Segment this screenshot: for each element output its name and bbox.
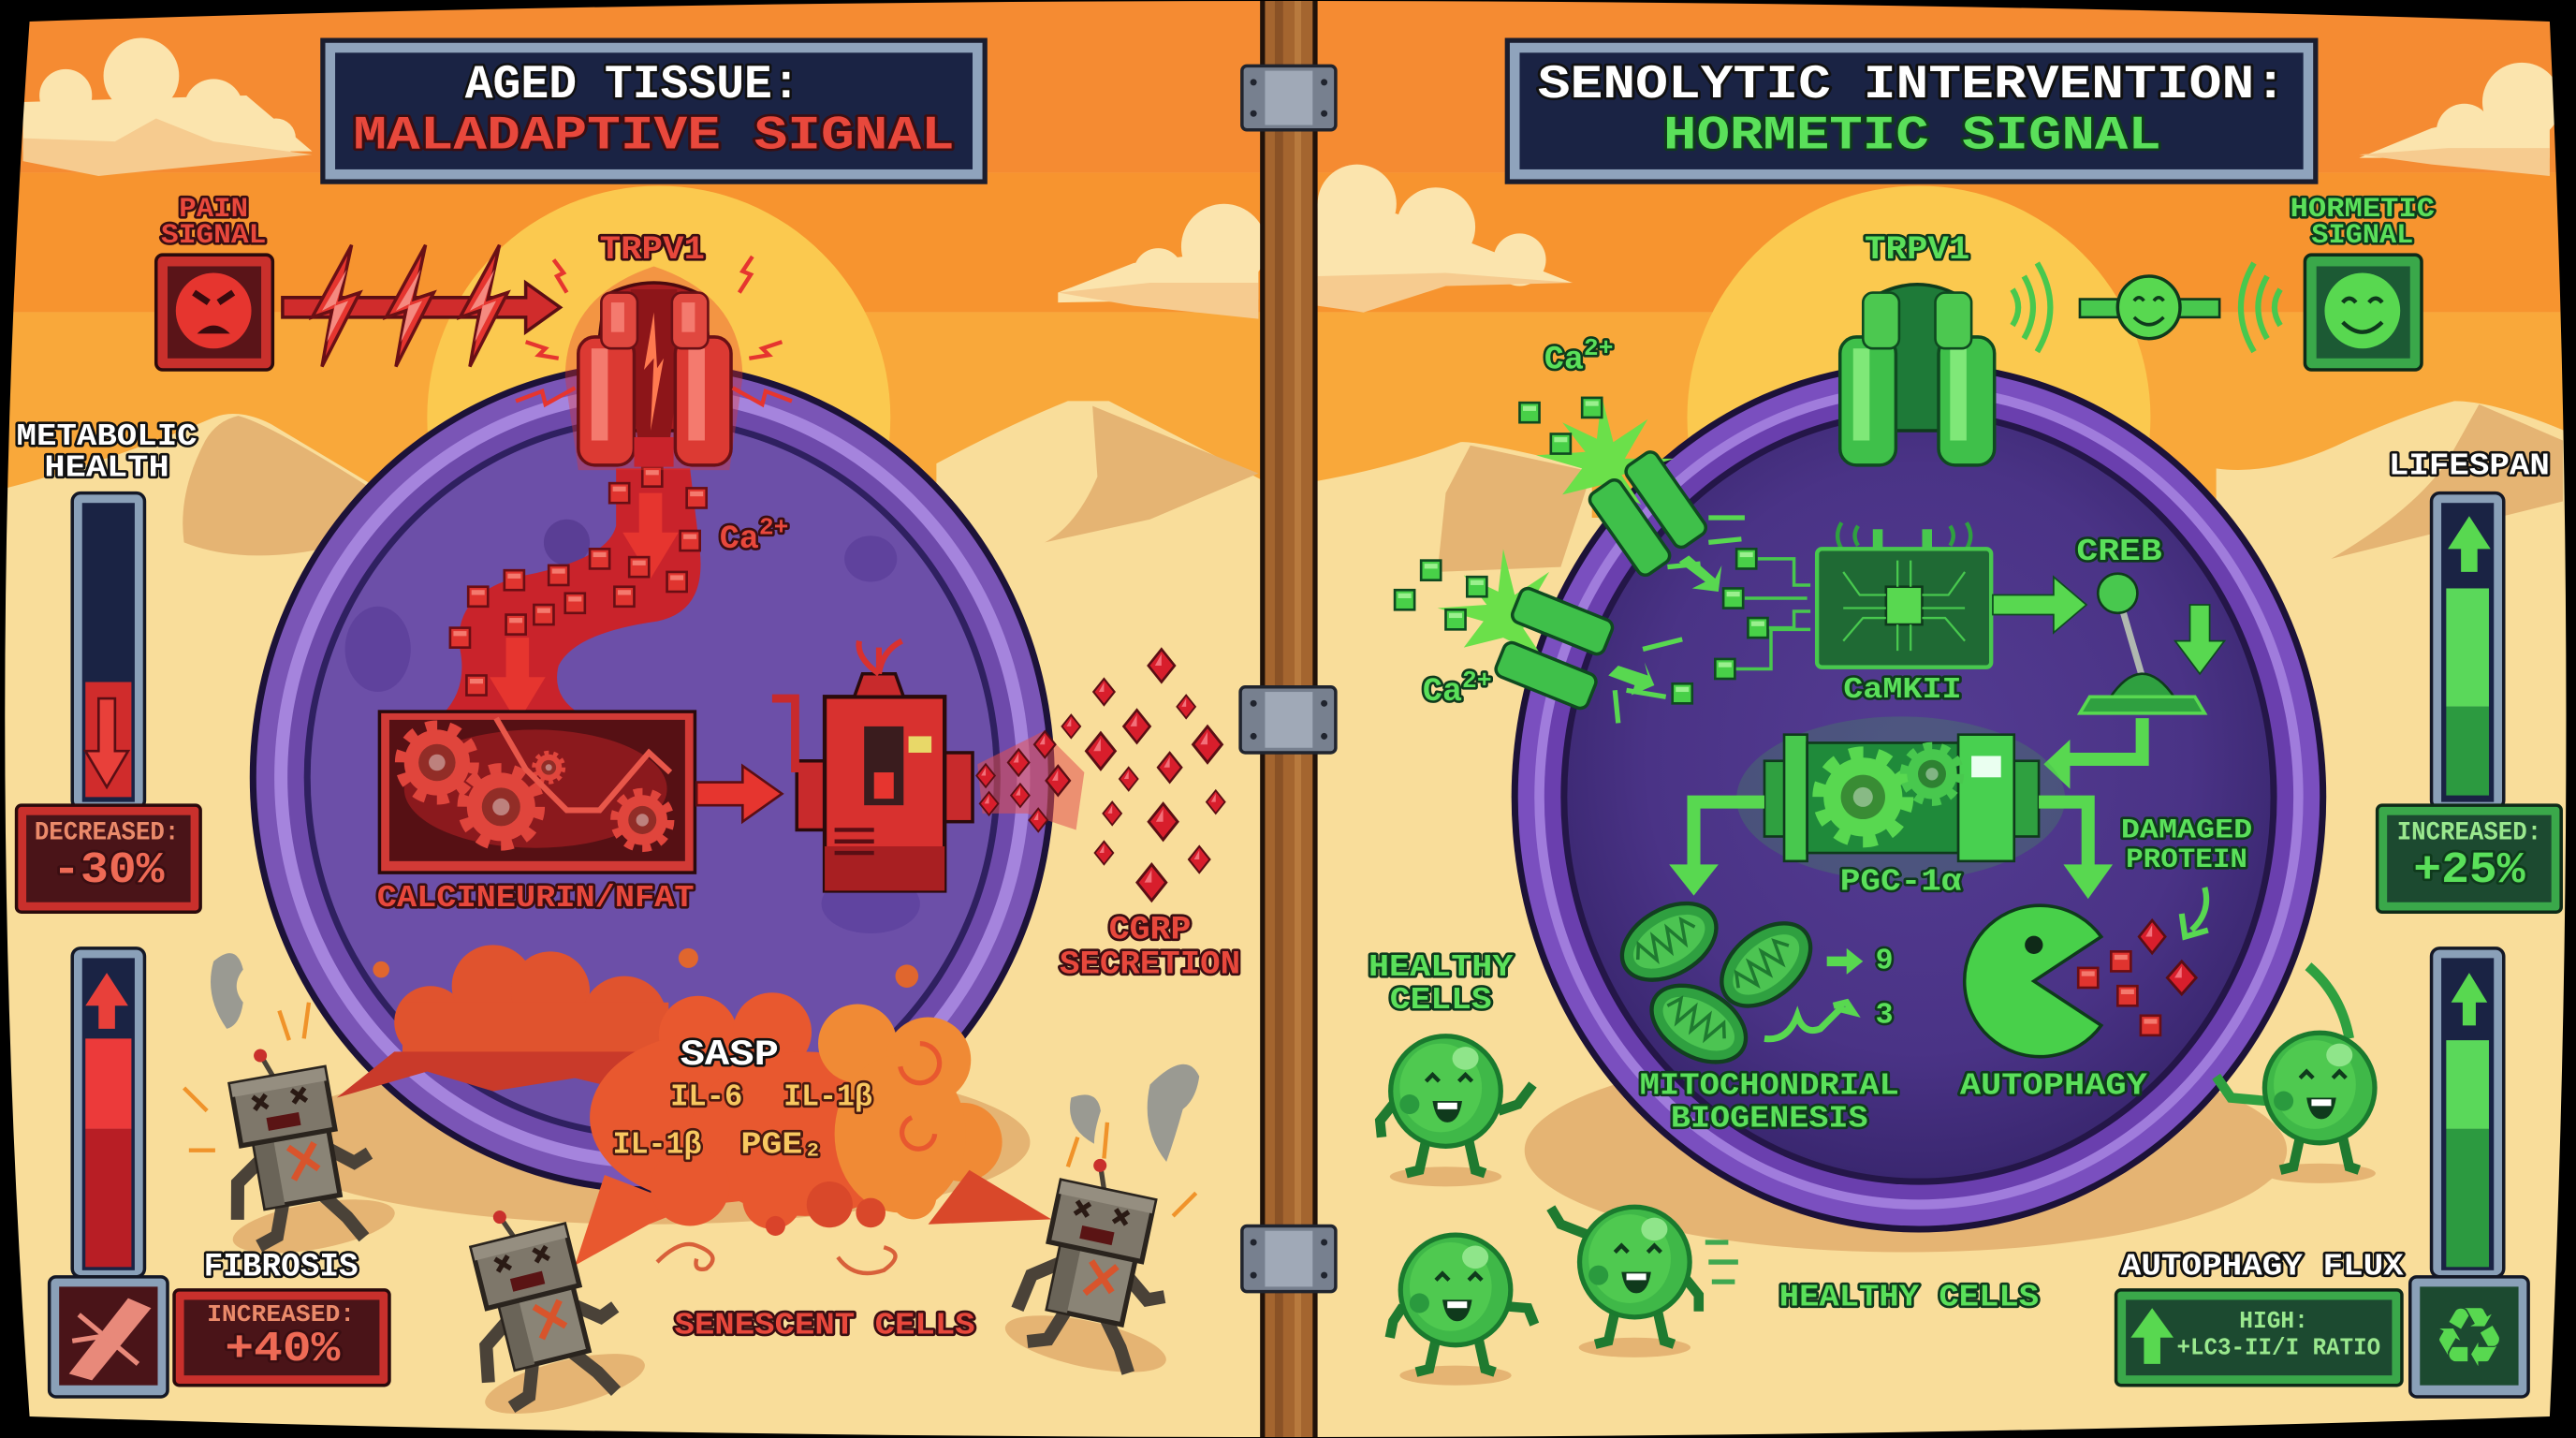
- label: CGRP secretion: CGRP: [1109, 912, 1191, 949]
- stat box: increased fibrosis: [174, 1290, 389, 1386]
- secretion machine: [772, 641, 973, 890]
- mitochondria counts: 9: [1876, 945, 1894, 977]
- arrow: calcineurin to machine: [696, 766, 782, 822]
- stat box: increased fibrosis: +40%: [225, 1325, 341, 1373]
- pacman autophagy: [1965, 905, 2101, 1057]
- stat box: decreased: [17, 805, 200, 912]
- icon: smile face: [2305, 255, 2422, 370]
- icon: fibrosis fiber: [50, 1277, 168, 1397]
- CGRP secretion diamonds: [976, 649, 1225, 901]
- label: CGRP secretion: SECRETION: [1060, 946, 1240, 983]
- healthy cell 2: [1390, 1232, 1534, 1386]
- calcineurin box: [379, 712, 695, 873]
- label: pain signal: [161, 193, 266, 251]
- clouds right: [1318, 63, 2561, 313]
- panel: senolytic intervention: [1314, 38, 2576, 1397]
- ground shadow under right cell: [1525, 1049, 2287, 1253]
- label: healthy cells top: [1368, 950, 1513, 1019]
- cell left: [250, 361, 1055, 1193]
- labels: Ca2+ right: 2+: [1584, 334, 1614, 362]
- SASP labels: [613, 1034, 872, 1163]
- stat box: increased fibrosis: INCREASED:: [207, 1300, 355, 1328]
- dunes left: [0, 401, 1262, 567]
- mitochondria counts: 3: [1876, 999, 1894, 1032]
- label: lifespan: LIFESPAN: [2389, 449, 2550, 485]
- icon: recycle: ♻: [2433, 1290, 2506, 1386]
- SASP labels: IL-1β: [783, 1080, 872, 1116]
- arrow: CREB to PGC-1a: [2063, 718, 2143, 759]
- SASP cloud: [337, 945, 1051, 1273]
- label: calcineurin: CALCINEURIN/NFAT: [377, 881, 695, 917]
- calcium stream: [440, 467, 707, 723]
- ground shadow under left cell: [268, 1060, 1030, 1225]
- SASP labels: IL-1β: [613, 1127, 701, 1163]
- label: mitochondrial biogenesis: BIOGENESIS: [1671, 1101, 1868, 1137]
- icon: angry face: [156, 255, 272, 370]
- cell right: [1512, 361, 2326, 1232]
- title: senolytic intervention: [1505, 38, 2318, 184]
- robot: senescent cell 2: [441, 1185, 651, 1426]
- healthy cell 1: [1380, 1034, 1533, 1186]
- central wooden post: [1240, 0, 1336, 1438]
- labels: Ca2+ right: 2+: [1462, 667, 1492, 695]
- label: metabolic health: METABOLIC: [17, 419, 198, 455]
- SASP labels: IL-6: [670, 1080, 742, 1116]
- stat box: increased lifespan: +25%: [2413, 846, 2525, 896]
- label: pain signal: SIGNAL: [161, 219, 266, 251]
- mitochondria counts: [1764, 945, 1894, 1039]
- label: CaMKII: CaMKII: [1843, 674, 1962, 707]
- title: senolytic intervention: SENOLYTIC INTERVENTION:: [1538, 59, 2287, 112]
- title: senolytic intervention: HORMETIC SIGNAL: [1663, 110, 2161, 163]
- icon: recycle: [2410, 1277, 2528, 1397]
- label: damaged protein: [2121, 814, 2252, 875]
- clamp top: [1242, 66, 1336, 130]
- label: fibrosis: FIBROSIS: [204, 1248, 359, 1285]
- label: healthy cells top: HEALTHY: [1368, 950, 1513, 986]
- stat box: LC3 ratio: HIGH:: [2239, 1307, 2308, 1335]
- clamp middle: [1240, 687, 1336, 753]
- stat box: increased lifespan: INCREASED:: [2397, 818, 2541, 847]
- title: aged tissue: [320, 38, 988, 184]
- SASP labels: PGE₂: [741, 1127, 823, 1163]
- stat box: decreased: DECREASED:: [35, 818, 179, 847]
- PGC-1a cylinder: [1736, 716, 2065, 881]
- label: mitochondrial biogenesis: MITOCHONDRIAL: [1640, 1068, 1899, 1104]
- label: senescent cells: SENESCENT CELLS: [674, 1309, 975, 1344]
- label: pain signal: PAIN: [179, 193, 248, 225]
- label: healthy cells bottom: HEALTHY CELLS: [1779, 1281, 2039, 1316]
- label: CGRP secretion: [1060, 912, 1240, 983]
- calcium squares: [1395, 398, 1602, 629]
- label: Ca2+ left: Ca: [720, 521, 759, 558]
- TRPV1 red channel: [516, 257, 792, 470]
- robot: senescent cell 3: [1001, 1147, 1205, 1384]
- stat box: LC3 ratio: +LC3-II/I RATIO: [2177, 1333, 2380, 1361]
- clouds left: [23, 38, 1266, 319]
- label: metabolic health: HEALTH: [44, 450, 169, 486]
- label: hormetic signal: SIGNAL: [2311, 219, 2413, 251]
- calcium channels with bursts: [1438, 396, 1745, 723]
- hormetic waves and small face: [2012, 263, 2280, 352]
- arrow: lightning pain signal: [283, 245, 560, 367]
- SASP labels: SASP: [681, 1034, 779, 1076]
- sun left: [427, 185, 890, 649]
- label: autophagy flux: AUTOPHAGY FLUX: [2121, 1249, 2404, 1284]
- stat box: LC3 ratio: [2116, 1290, 2402, 1386]
- label: TRPV1 green: TRPV1: [1865, 231, 1969, 269]
- label: CREB: CREB: [2076, 535, 2162, 570]
- CREB lever: [2080, 574, 2224, 713]
- label: damaged protein: PROTEIN: [2126, 844, 2247, 875]
- healthy cell 3: [1551, 1205, 1738, 1357]
- gauge: autophagy flux: [2432, 948, 2504, 1277]
- dunes right: [1314, 401, 2576, 572]
- gauge: lifespan: [2389, 449, 2550, 809]
- arrow: damaged protein: [2182, 888, 2208, 937]
- mitochondria: [1609, 888, 1826, 1078]
- labels: Ca2+ right: [1423, 334, 1614, 711]
- labels: Ca2+ right: Ca: [1544, 342, 1584, 379]
- panel: aged tissue: [0, 38, 1266, 1426]
- label: TRPV1 red: TRPV1: [600, 231, 705, 269]
- gauge: metabolic health: [17, 419, 198, 809]
- arrow: to autophagy: [2039, 802, 2113, 899]
- CaMKII chip: [1673, 522, 1991, 703]
- gauge: fibrosis: [72, 948, 144, 1277]
- label: autophagy: AUTOPHAGY: [1960, 1068, 2147, 1104]
- damaged protein fragments: [2078, 920, 2196, 1035]
- label: damaged protein: DAMAGED: [2121, 814, 2252, 845]
- robot: senescent cell 1: [201, 1031, 399, 1263]
- healthy cell 4: [2217, 966, 2378, 1183]
- label: Ca2+ left: 2+: [759, 514, 788, 542]
- stat box: decreased: -30%: [52, 846, 165, 896]
- arrow: to mitochondria: [1669, 802, 1764, 896]
- arrow: CaMKII to CREB: [1993, 577, 2086, 633]
- sparks: [184, 1003, 1196, 1216]
- label: hormetic signal: HORMETIC: [2291, 193, 2435, 225]
- labels: Ca2+ right: Ca: [1423, 673, 1462, 711]
- smoke: [211, 953, 1199, 1162]
- TRPV1 green channel: [1840, 285, 1995, 465]
- label: healthy cells top: CELLS: [1390, 983, 1492, 1019]
- title: aged tissue: MALADAPTIVE SIGNAL: [353, 110, 955, 163]
- clamp bottom: [1242, 1225, 1336, 1292]
- label: mitochondrial biogenesis: [1640, 1068, 1899, 1137]
- stat box: increased lifespan: [2378, 805, 2561, 912]
- title: aged tissue: AGED TISSUE:: [465, 59, 800, 112]
- arrow head: [2043, 740, 2070, 789]
- sun right: [1687, 185, 2150, 649]
- label: metabolic health: [17, 419, 198, 486]
- label: PGC-1a: PGC-1α: [1840, 865, 1962, 901]
- label: hormetic signal: [2291, 193, 2435, 251]
